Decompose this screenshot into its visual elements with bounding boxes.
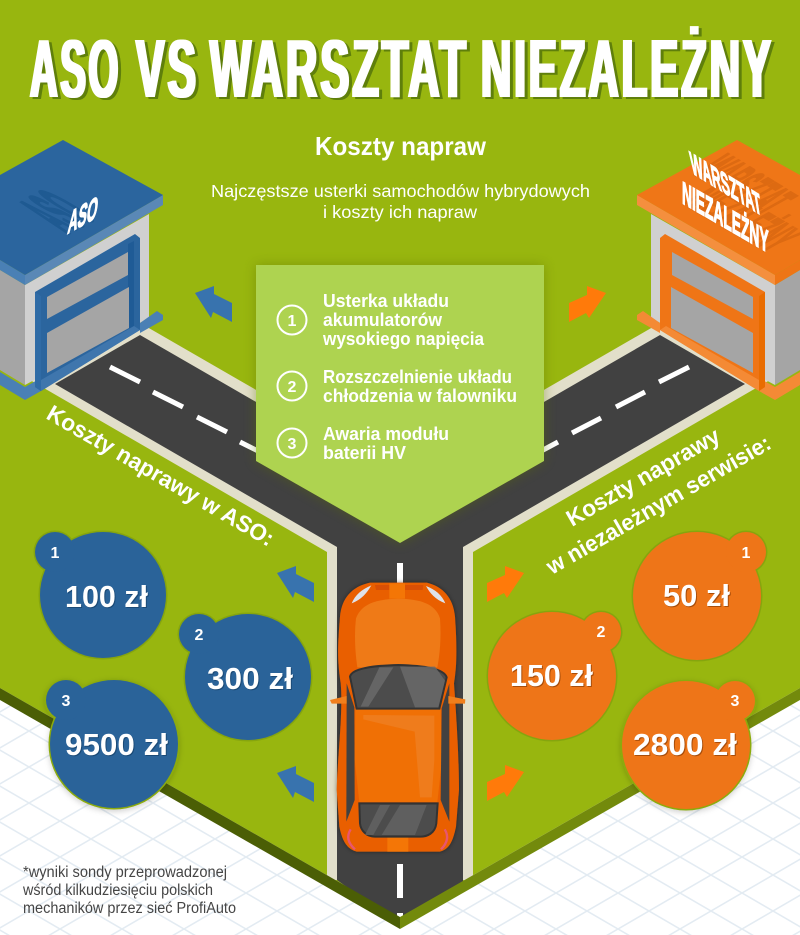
independent cost 2: 150 zł — [486, 610, 622, 742]
item 2: 2 — [288, 379, 297, 396]
ASO cost 2: 300 zł — [178, 612, 312, 742]
door frame — [35, 234, 140, 391]
heading: costs at ASO: Koszty naprawy w ASO: — [42, 400, 279, 551]
roof sign: NIEZALEŻNY — [682, 175, 769, 261]
arrow: towards ASO, top — [195, 286, 232, 322]
ASO cost 1: 100 zł — [34, 530, 168, 660]
footnote: wśród kilkudziesięciu polskich — [22, 882, 213, 899]
plinth — [0, 372, 41, 400]
independent cost 3: 2800 zł — [620, 680, 756, 810]
walls — [0, 270, 25, 385]
item 3: baterii HV — [323, 443, 406, 463]
roof — [0, 260, 25, 285]
panel: list of faults — [256, 265, 544, 543]
side windows — [346, 683, 355, 822]
subheading: Najczęstsze usterki samochodów hybrydowych — [211, 181, 590, 201]
independent cost 1: 50 zł — [632, 530, 768, 662]
arrow: towards garage, bottom — [487, 765, 524, 801]
independent cost 3: 2800 zł: 2800 zł — [633, 727, 737, 762]
item 2: chłodzenia w falowniku — [323, 386, 517, 406]
windscreen — [350, 665, 447, 709]
heading: Koszty napraw: Koszty napraw — [315, 131, 487, 161]
independent cost 1: 50 zł: 1 — [742, 545, 751, 562]
roof sign: WARSZTAT — [688, 145, 764, 224]
footnote — [22, 864, 236, 917]
item 3 — [278, 424, 449, 463]
title: VS — [136, 22, 199, 115]
kerbs — [30, 316, 770, 880]
independent cost 1: 50 zł: 50 zł — [663, 578, 730, 613]
rear window — [359, 803, 438, 837]
ASO cost 1: 100 zł: 100 zł — [65, 579, 148, 614]
mirrors — [330, 696, 347, 704]
plate edge: left — [0, 688, 400, 929]
walls and door — [637, 140, 800, 400]
garage: warsztat niezależny — [637, 140, 800, 400]
roof sign shadow: ASO — [2, 180, 112, 243]
heading: costs at independent garage: Koszty naprawy — [562, 422, 724, 531]
car — [330, 583, 465, 852]
item 1 — [278, 291, 485, 349]
item 1: akumulatorów — [323, 310, 443, 330]
asphalt — [55, 335, 745, 925]
ASO cost 3: 9500 zł: 9500 zł — [65, 727, 168, 762]
item 1: Usterka układu — [323, 291, 449, 311]
ASO cost 2: 300 zł: 2 — [195, 627, 204, 644]
arrow: towards garage, top — [569, 286, 606, 322]
title: WARSZTAT — [210, 22, 469, 115]
road junction — [30, 316, 770, 925]
footnote: *wyniki sondy przeprowadzonej — [23, 864, 227, 881]
item 3: 3 — [288, 436, 297, 453]
ASO cost 2: 300 zł: 300 zł — [207, 661, 293, 696]
headlights — [352, 585, 371, 603]
arrow: towards ASO, middle — [277, 566, 314, 602]
heading: costs at independent garage: w niezależnym serwisie: — [541, 429, 775, 580]
subheading — [211, 181, 590, 222]
ASO cost 1: 100 zł: 1 — [51, 545, 60, 562]
roof sign: ASO — [66, 190, 100, 242]
independent cost 3: 2800 zł: 3 — [731, 693, 740, 710]
item 2: Rozszczelnienie układu — [323, 367, 512, 387]
roof — [355, 709, 442, 802]
item 2 — [278, 367, 517, 406]
title — [30, 22, 774, 115]
arrow: towards garage, middle — [487, 566, 524, 602]
garage: ASO — [0, 140, 163, 400]
item 1: 1 — [288, 313, 297, 330]
arrow: towards ASO, bottom — [277, 766, 314, 802]
roof sign shadow — [682, 152, 800, 252]
lane dashes — [110, 367, 689, 457]
hood — [355, 599, 441, 667]
ASO cost 3: 9500 zł — [44, 678, 180, 810]
ASO cost 3: 9500 zł: 3 — [62, 693, 71, 710]
item 3: Awaria modułu — [323, 424, 449, 444]
independent cost 2: 150 zł: 2 — [597, 624, 606, 641]
plate edge: right — [400, 688, 800, 929]
tail lights — [348, 829, 355, 849]
footnote: mechaników przez sieć ProfiAuto — [23, 900, 236, 917]
title: ASO — [30, 22, 121, 115]
body — [337, 583, 459, 852]
independent cost 2: 150 zł: 150 zł — [510, 658, 593, 693]
item 1: wysokiego napięcia — [322, 329, 485, 349]
door panes — [47, 252, 128, 319]
subheading: i koszty ich napraw — [323, 202, 477, 222]
